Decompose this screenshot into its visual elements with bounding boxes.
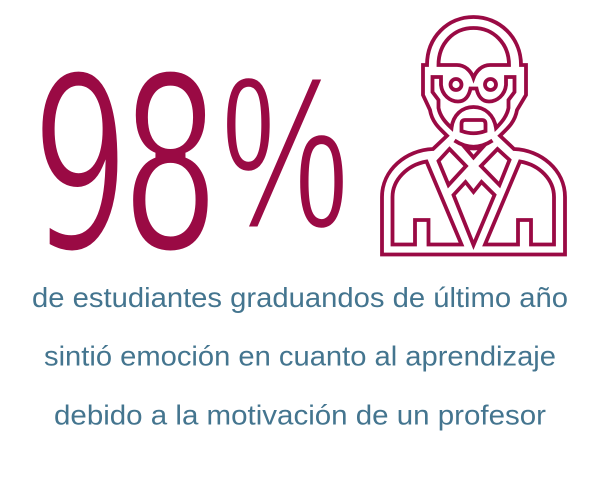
icon glasses and beard	[432, 77, 514, 128]
icon right eye	[485, 79, 496, 90]
caption line 3: debido a la motivación de un profesor	[54, 400, 546, 430]
caption line 1: de estudiantes graduandos de último año	[32, 282, 568, 313]
icon collar	[454, 140, 492, 147]
number 98: 98	[31, 26, 211, 308]
percent sign: %	[221, 32, 349, 275]
icon left lapel	[438, 149, 466, 185]
icon left eye	[450, 79, 462, 90]
caption text	[32, 282, 568, 430]
icon collar triangle	[465, 148, 482, 158]
icon hair	[438, 28, 509, 78]
icon: bearded professor with glasses	[382, 17, 565, 254]
icon necktie	[454, 182, 494, 245]
icon left jacket panel	[392, 162, 462, 244]
icon right lapel	[481, 149, 510, 185]
caption line 2: sintió emoción en cuanto al aprendizaje	[44, 340, 556, 372]
icon outer silhouette	[382, 17, 565, 254]
icon right jacket panel	[485, 162, 554, 244]
big statistic: 98%	[31, 26, 349, 308]
icon mouth	[462, 120, 486, 133]
